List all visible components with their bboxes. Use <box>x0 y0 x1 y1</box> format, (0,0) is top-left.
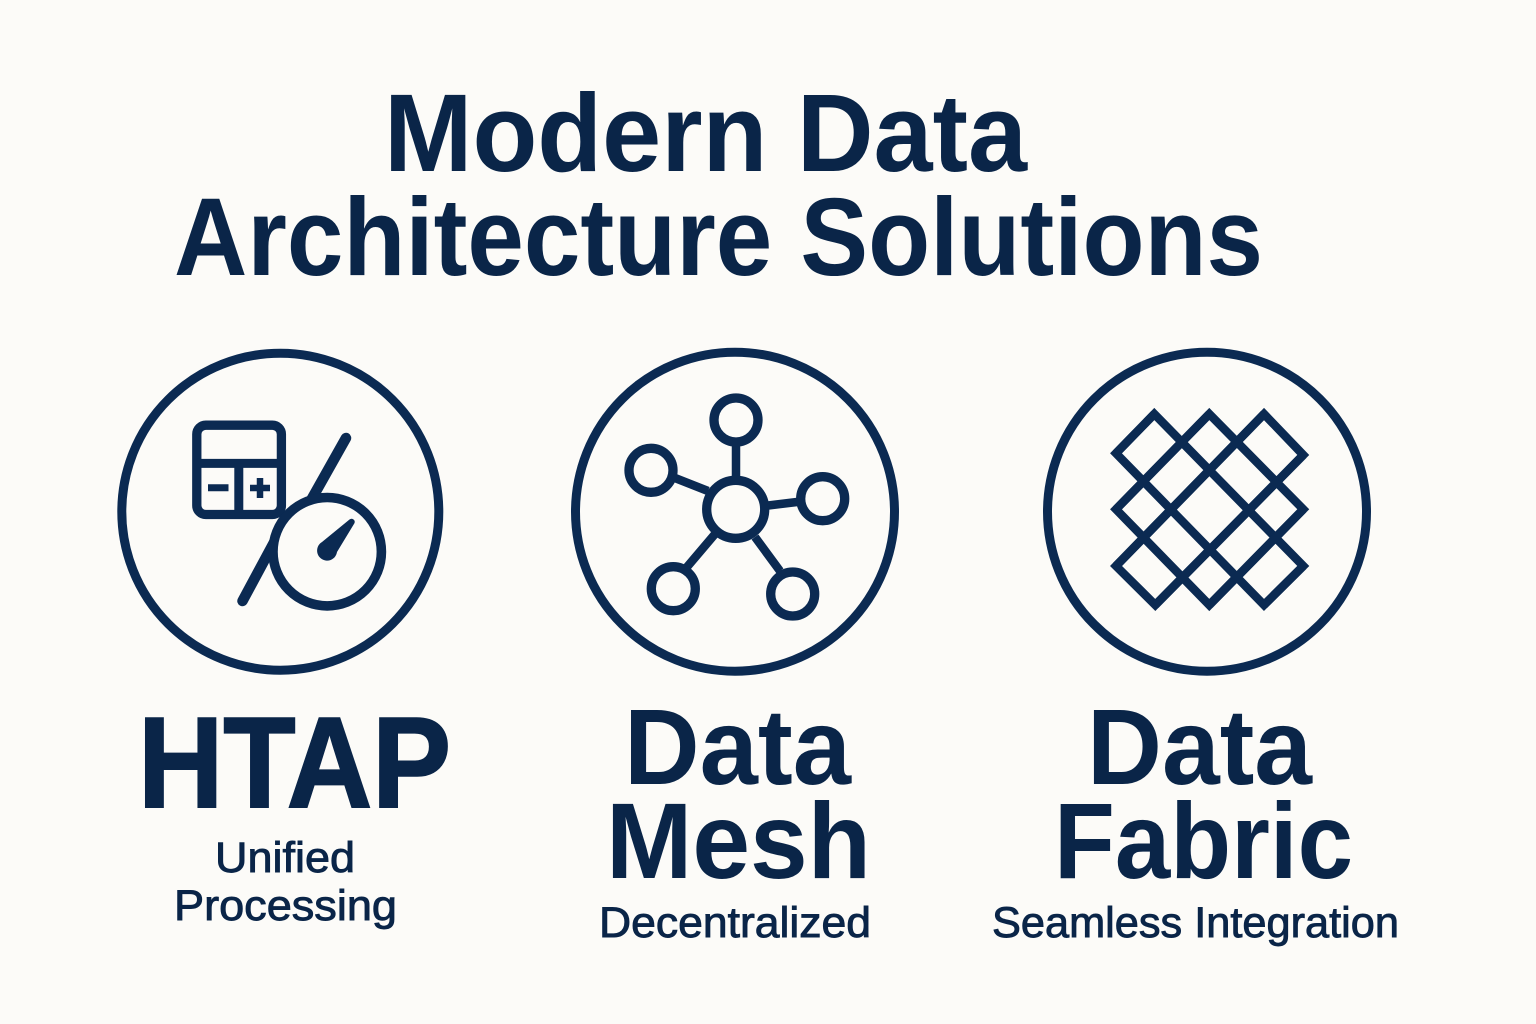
heading: HTAP: HTAP <box>138 691 451 835</box>
description: Seamless Integration: Seamless Integration <box>992 899 1399 947</box>
panel: HTAP <box>122 353 451 930</box>
description: Unified Processing: Processing <box>174 882 397 930</box>
heading: Data Mesh <box>606 686 871 901</box>
heading: Data Fabric <box>1054 686 1353 901</box>
title <box>174 72 1263 299</box>
icon: woven diamond lattice in circle <box>1048 352 1366 671</box>
heading: Data Fabric: Data <box>1087 686 1313 807</box>
panel: Data Mesh <box>576 352 894 947</box>
panel: Data Fabric <box>992 352 1399 947</box>
heading: Data Mesh: Mesh <box>606 780 871 901</box>
description: Unified Processing <box>174 834 397 930</box>
heading: Data Mesh: Data <box>624 686 852 807</box>
title: Architecture Solutions <box>174 176 1263 299</box>
heading: Data Fabric: Fabric <box>1054 780 1353 901</box>
icon: calculator and gauge in circle <box>122 353 439 670</box>
icon: hub and spoke network in circle <box>576 352 894 671</box>
description: Decentralized: Decentralized <box>599 899 871 947</box>
description: Unified Processing: Unified <box>215 834 355 882</box>
title: Modern Data <box>384 72 1028 195</box>
